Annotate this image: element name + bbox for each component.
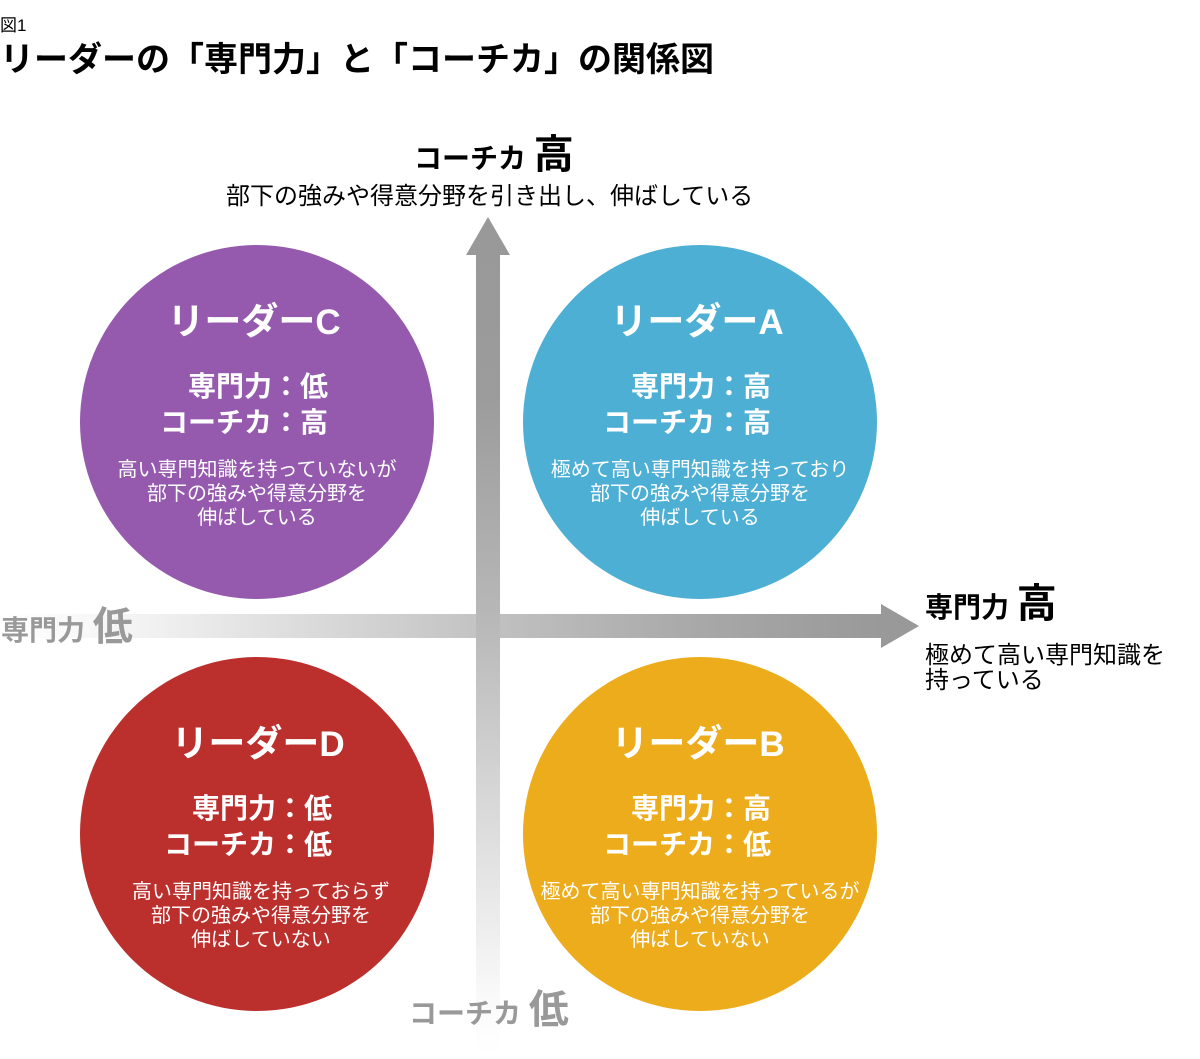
ratings: 専門力：高 [631, 793, 771, 824]
name: リーダーC [167, 301, 341, 342]
axis description: expertise high: 極めて高い専門知識を [925, 642, 1165, 669]
panel: leader A [523, 245, 877, 599]
title: リーダーの「専門力」と「コーチカ」の関係図 [0, 41, 714, 79]
axis label: expertise high: 専門力 高 [925, 582, 1057, 626]
description [551, 459, 849, 529]
name: リーダーB [611, 723, 785, 764]
axis label: expertise low: 専門力 低 [1, 605, 133, 649]
description: 伸ばしている [197, 507, 317, 529]
panel: leader B [523, 657, 877, 1011]
description [540, 881, 860, 951]
ratings: 専門力：低 [188, 371, 328, 402]
name: リーダーA [610, 301, 784, 342]
ratings: 専門力：高 [631, 371, 771, 402]
figure label: 図1 [0, 16, 26, 35]
description: 部下の強みや得意分野を [147, 483, 367, 505]
ratings [603, 793, 771, 860]
description: 伸ばしている [640, 507, 760, 529]
ratings: 専門力：低 [192, 793, 332, 824]
axis label: coach high: コーチカ 高 [414, 133, 574, 177]
axis description: coach high: 部下の強みや得意分野を引き出し、伸ばしている [226, 183, 753, 210]
axis description: expertise high [925, 642, 1165, 694]
description: 伸ばしていない [630, 929, 770, 951]
ratings: コーチカ：低 [164, 829, 332, 860]
ratings [164, 793, 332, 860]
description: 部下の強みや得意分野を [590, 905, 810, 927]
panel: leader C [80, 245, 434, 599]
ratings [603, 371, 771, 438]
ratings [160, 371, 328, 438]
description: 伸ばしていない [191, 929, 331, 951]
description: 部下の強みや得意分野を [590, 483, 810, 505]
description: 極めて高い専門知識を持っており [551, 459, 849, 481]
description [132, 881, 390, 951]
axis description: expertise high: 持っている [925, 667, 1044, 694]
axis label: coach low: コーチカ 低 [409, 988, 569, 1032]
ratings: コーチカ：低 [603, 829, 771, 860]
ratings: コーチカ：高 [160, 407, 328, 438]
description: 高い専門知識を持っておらず [132, 881, 390, 903]
description: 極めて高い専門知識を持っているが [540, 881, 860, 903]
description: 部下の強みや得意分野を [151, 905, 371, 927]
ratings: コーチカ：高 [603, 407, 771, 438]
description [118, 459, 396, 529]
name: リーダーD [171, 723, 345, 764]
description: 高い専門知識を持っていないが [118, 459, 396, 481]
panel: leader D [80, 657, 434, 1011]
